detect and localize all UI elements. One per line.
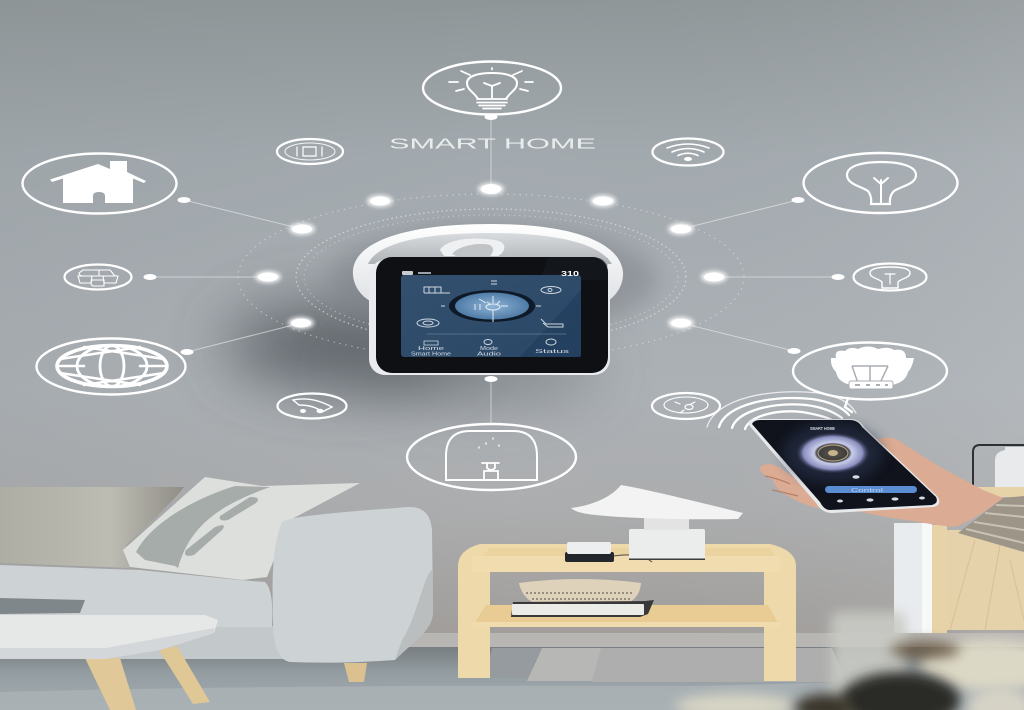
screen labels: [411, 346, 569, 358]
coffee table: [0, 615, 218, 710]
screen labels: Audio: [477, 352, 501, 358]
smart hub device: [353, 224, 623, 375]
phone action button: Control: [851, 488, 883, 494]
phone header: SMART HOME: [810, 426, 835, 431]
floor rug: [0, 647, 1024, 710]
blurred foreground objects: [675, 612, 1024, 710]
icon: house: [22, 154, 176, 214]
screen labels: Home: [418, 346, 444, 352]
smart speaker puck: [565, 542, 652, 562]
glowing nodes: [144, 114, 844, 382]
books: [511, 600, 654, 617]
phone app dial: [783, 423, 883, 483]
sleeve: [958, 496, 1024, 552]
back cushion: [0, 487, 184, 568]
baseboard: [0, 633, 1024, 648]
icon: globe: [36, 338, 186, 394]
woven basket: [519, 579, 641, 603]
icon: signal badge: [278, 394, 346, 418]
phone tab bar: [837, 475, 925, 502]
wifi arcs toward the phone: [707, 392, 856, 429]
device body: [369, 257, 610, 375]
dotted rings around the device: [238, 194, 744, 360]
status bar: 310: [561, 271, 579, 278]
screen labels: Mode: [480, 346, 498, 352]
hand and sleeve: [760, 437, 1024, 552]
tray: [0, 598, 85, 614]
icon: router bubble: [793, 342, 947, 412]
throw pillow: [123, 477, 360, 580]
icon: top light bulb: [423, 62, 561, 114]
photo frame and vase: [973, 445, 1024, 487]
lower board: [472, 605, 780, 627]
device screen: [401, 275, 581, 357]
armrest: [273, 507, 433, 663]
device halo: [353, 224, 623, 303]
screen labels: Status: [535, 349, 569, 355]
title: SMART HOME: [389, 136, 597, 152]
icon: right light bulb: [804, 153, 958, 213]
icon: bottom appliance: [407, 424, 576, 490]
phone action button: [825, 486, 917, 494]
status bar: [402, 271, 579, 278]
screen icons: [417, 281, 566, 345]
screen labels: Smart Home: [411, 352, 451, 358]
smartphone: [748, 419, 939, 513]
wooden shelf: [458, 485, 796, 681]
connector lines: [150, 116, 838, 424]
sofa base: [0, 626, 285, 659]
icon: blocks badge: [64, 264, 132, 290]
icon: wifi badge: [652, 138, 724, 166]
sofa leg: [344, 663, 367, 682]
seat cushion: [0, 565, 272, 627]
icon: sensor badge: [652, 393, 720, 419]
sofa: [0, 477, 433, 682]
top board: [472, 556, 780, 572]
back supports: [458, 544, 796, 681]
icon: bulb badge: [854, 264, 926, 290]
icon: chip badge: [277, 139, 343, 164]
side post and cabinet: [894, 487, 1024, 633]
central dial: [449, 290, 535, 322]
table lamp: [571, 485, 743, 560]
